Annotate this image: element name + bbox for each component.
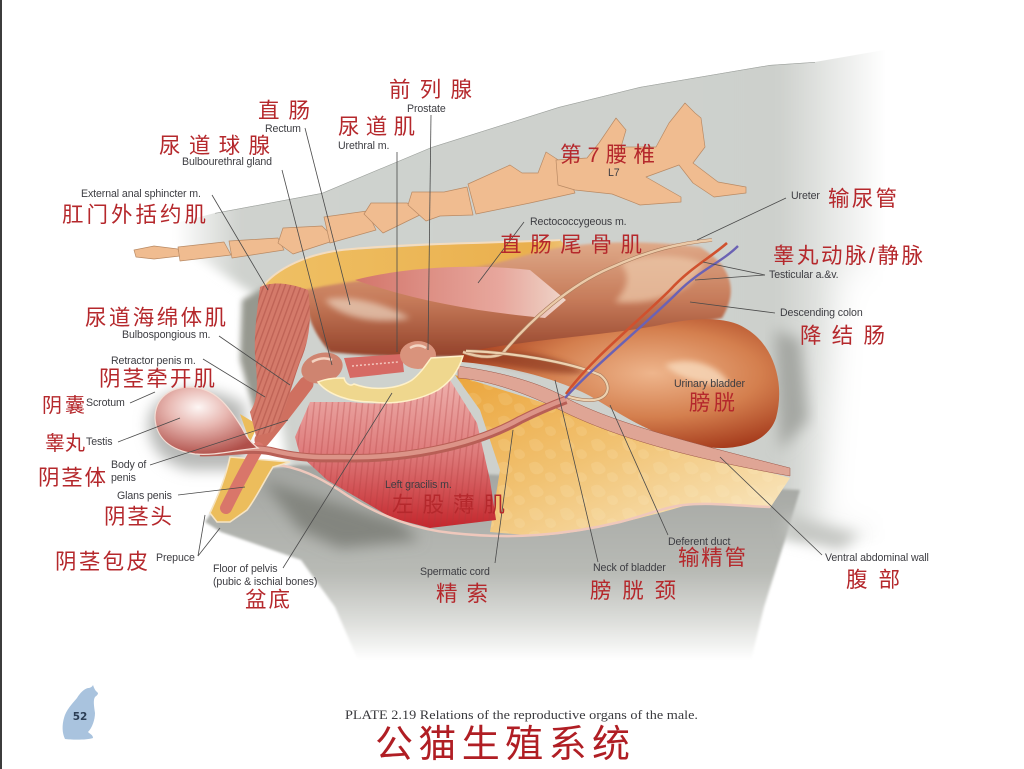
english anatomical labels: Testis: [86, 436, 112, 448]
chinese handwritten labels: 精索: [436, 582, 488, 606]
english anatomical labels: Neck of bladder: [593, 562, 666, 574]
arrow: ureter tube: [463, 240, 712, 357]
chinese handwritten labels: 左股薄肌: [392, 493, 505, 517]
panel: body and glans of penis: [226, 384, 306, 508]
english anatomical labels: Prostate: [407, 103, 446, 115]
english anatomical labels: Bulbospongious m.: [122, 329, 210, 341]
arrow: testicular artery: [566, 243, 727, 394]
english anatomical labels: Descending colon: [780, 307, 863, 319]
english anatomical labels: Left gracilis m.: [385, 479, 452, 491]
english anatomical labels: Floor of pelvis: [213, 563, 277, 575]
english anatomical labels: Deferent duct: [668, 536, 730, 548]
panel: bulbospongious muscle: [250, 284, 310, 436]
chinese handwritten labels: 肛门外括约肌: [62, 203, 206, 227]
chinese handwritten labels: 尿道海绵体肌: [85, 306, 226, 330]
panel: floor of pelvis bone: [318, 356, 463, 403]
label: L7: L7: [608, 167, 620, 179]
panel: upper body fat: [260, 240, 600, 300]
chinese handwritten labels: 尿道球腺: [159, 134, 270, 158]
panel: urethra, prostate and bulbourethral gland: [298, 341, 436, 388]
chinese handwritten labels: 第7腰椎: [560, 143, 655, 167]
english anatomical labels: Bulbourethral gland: [182, 156, 272, 168]
icon: cat silhouette page number: [63, 685, 98, 740]
chinese handwritten labels: 盆底: [245, 588, 290, 612]
panel: grey fur body background: [148, 30, 910, 660]
chinese handwritten labels: 阴茎牵开肌: [99, 367, 215, 391]
english anatomical labels: Rectococcygeous m.: [530, 216, 627, 228]
chinese handwritten labels: [38, 78, 923, 612]
chinese handwritten labels: 睾丸: [45, 432, 85, 455]
panel: urinary bladder: [462, 319, 779, 448]
english anatomical labels: Urethral m.: [338, 140, 389, 152]
english anatomical labels: Ureter: [791, 190, 820, 202]
leader lines: [118, 115, 822, 568]
english anatomical labels: External anal sphincter m.: [81, 188, 201, 200]
panel: rectococcygeous muscle: [355, 267, 566, 318]
english anatomical labels: Rectum: [265, 123, 301, 135]
english anatomical labels: penis: [111, 472, 136, 484]
icon: cat silhouette page number: 52: [73, 711, 87, 723]
chinese handwritten labels: 输精管: [678, 546, 746, 570]
arrow: spermatic cord: [200, 399, 566, 458]
chinese handwritten labels: 直肠尾骨肌: [500, 233, 642, 257]
chinese handwritten labels: 降结肠: [800, 324, 885, 348]
panel: body skin lower edge: [272, 464, 770, 536]
chinese handwritten labels: 输尿管: [828, 187, 897, 211]
panel: ventral abdominal wall band: [458, 366, 790, 476]
icon: scrotum and testis: [155, 387, 258, 454]
chinese handwritten labels: 膀胱: [689, 391, 735, 415]
panel: left gracilis muscle: [295, 380, 496, 528]
chinese handwritten labels: 阴茎体: [38, 466, 106, 490]
chinese handwritten labels: 直肠: [258, 99, 310, 123]
arrow: deferent duct loop: [466, 351, 608, 400]
panel: rectum and descending colon: [305, 242, 731, 357]
english anatomical labels: (pubic & ischial bones): [213, 576, 317, 588]
chinese handwritten labels: 睾丸动脉/静脉: [773, 244, 923, 268]
english anatomical labels: Testicular a.&v.: [769, 269, 838, 281]
icon: vertebrae and tail bones: [134, 103, 746, 261]
english anatomical labels: Prepuce: [156, 552, 195, 564]
title: chinese caption: 公猫生殖系统: [375, 724, 630, 766]
english anatomical labels: Body of: [111, 459, 146, 471]
chinese handwritten labels: 膀胱颈: [590, 579, 676, 603]
chinese handwritten labels: 腹部: [846, 568, 900, 592]
english anatomical labels: Ventral abdominal wall: [825, 552, 929, 564]
arrow: testicular vein: [565, 246, 738, 398]
english anatomical labels: Retractor penis m.: [111, 355, 196, 367]
plate caption: PLATE 2.19 Relations of the reproductive organs of the male.: [345, 708, 698, 722]
chinese handwritten labels: 尿道肌: [338, 115, 415, 139]
english anatomical labels: Urinary bladder: [674, 378, 745, 390]
chinese handwritten labels: 阴茎头: [104, 505, 172, 529]
panel: lower body fat: [455, 375, 790, 536]
english anatomical labels: Spermatic cord: [420, 566, 490, 578]
english anatomical labels: [81, 103, 929, 588]
chinese handwritten labels: 阴茎包皮: [55, 550, 148, 574]
chinese handwritten labels: 阴囊: [42, 394, 85, 417]
panel: prepuce with fat: [210, 414, 290, 522]
english anatomical labels: Scrotum: [86, 397, 125, 409]
chinese handwritten labels: 前列腺: [389, 78, 472, 102]
english anatomical labels: Glans penis: [117, 490, 172, 502]
